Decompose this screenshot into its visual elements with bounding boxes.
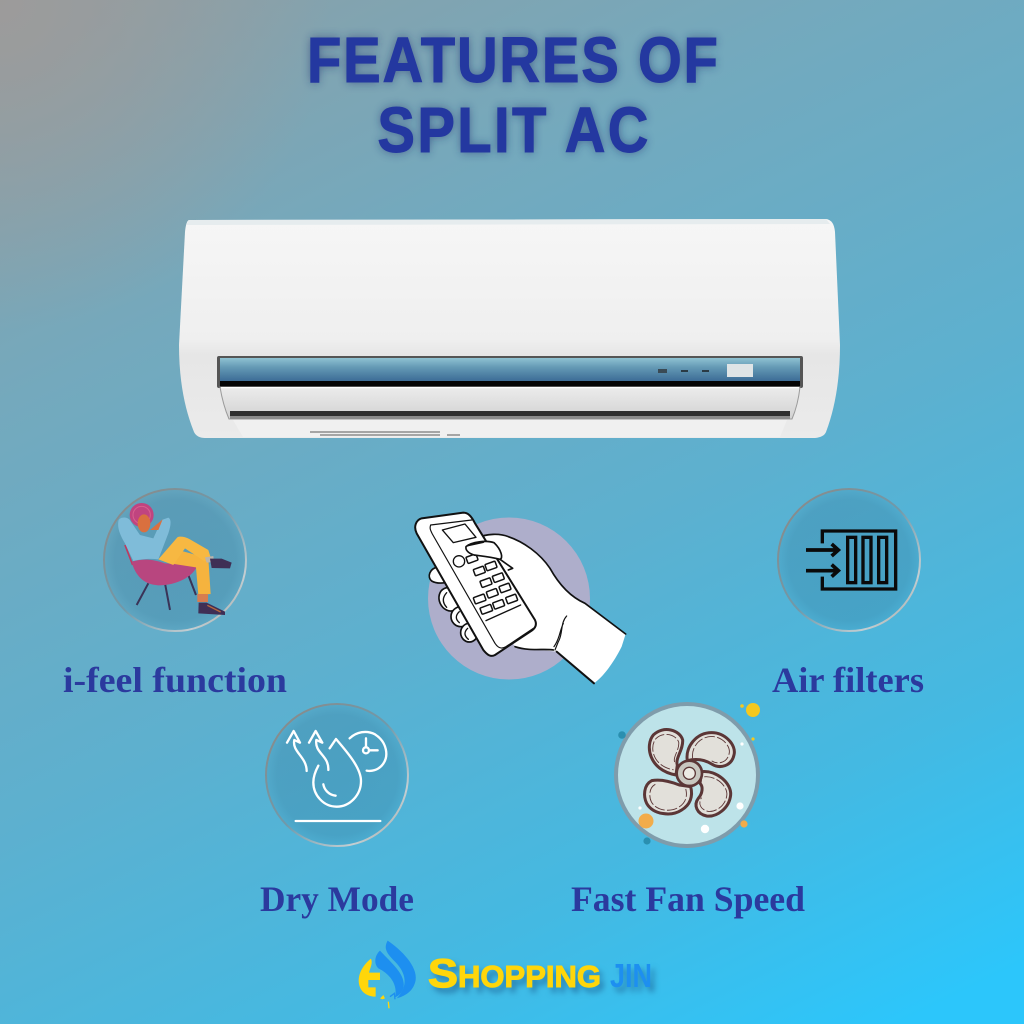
i-feel bubble (104, 489, 246, 631)
label: i-feel function: i-feel function (63, 660, 287, 700)
title: SPLIT AC (377, 94, 648, 166)
decorative dots (618, 703, 760, 845)
title: FEATURES OF (307, 24, 718, 96)
fast fan speed bubble (616, 703, 760, 846)
title: SPLIT AC (377, 94, 648, 166)
lilac circle (428, 518, 590, 680)
front display panel (217, 356, 803, 388)
air filters bubble (778, 489, 920, 631)
AC body (179, 219, 840, 438)
title: FEATURES OF (307, 24, 718, 96)
wordmark: HOPPING (458, 959, 601, 994)
label: dry mode: Dry Mode (260, 879, 414, 919)
icon: relaxing person (118, 503, 232, 615)
icon: hand holding remote (415, 513, 626, 683)
label: fast fan speed: Fast Fan Speed (571, 879, 805, 919)
title (307, 24, 718, 166)
icon: fan (645, 730, 734, 816)
remote control in hand (415, 513, 626, 683)
wordmark: JIN (610, 957, 652, 994)
logo: Shopping Jin (359, 941, 652, 1008)
icon: water drop, clock and arrows (287, 731, 386, 821)
wordmark: S (428, 952, 458, 996)
icon: logo flame (359, 941, 416, 1008)
louver and air slot (220, 387, 800, 437)
icon: air filter (806, 531, 896, 589)
label: air filters: Air filters (772, 660, 924, 700)
dry mode bubble (266, 704, 408, 846)
bottom label strip (310, 431, 460, 436)
air conditioner unit (179, 219, 840, 438)
wordmark (428, 952, 652, 996)
